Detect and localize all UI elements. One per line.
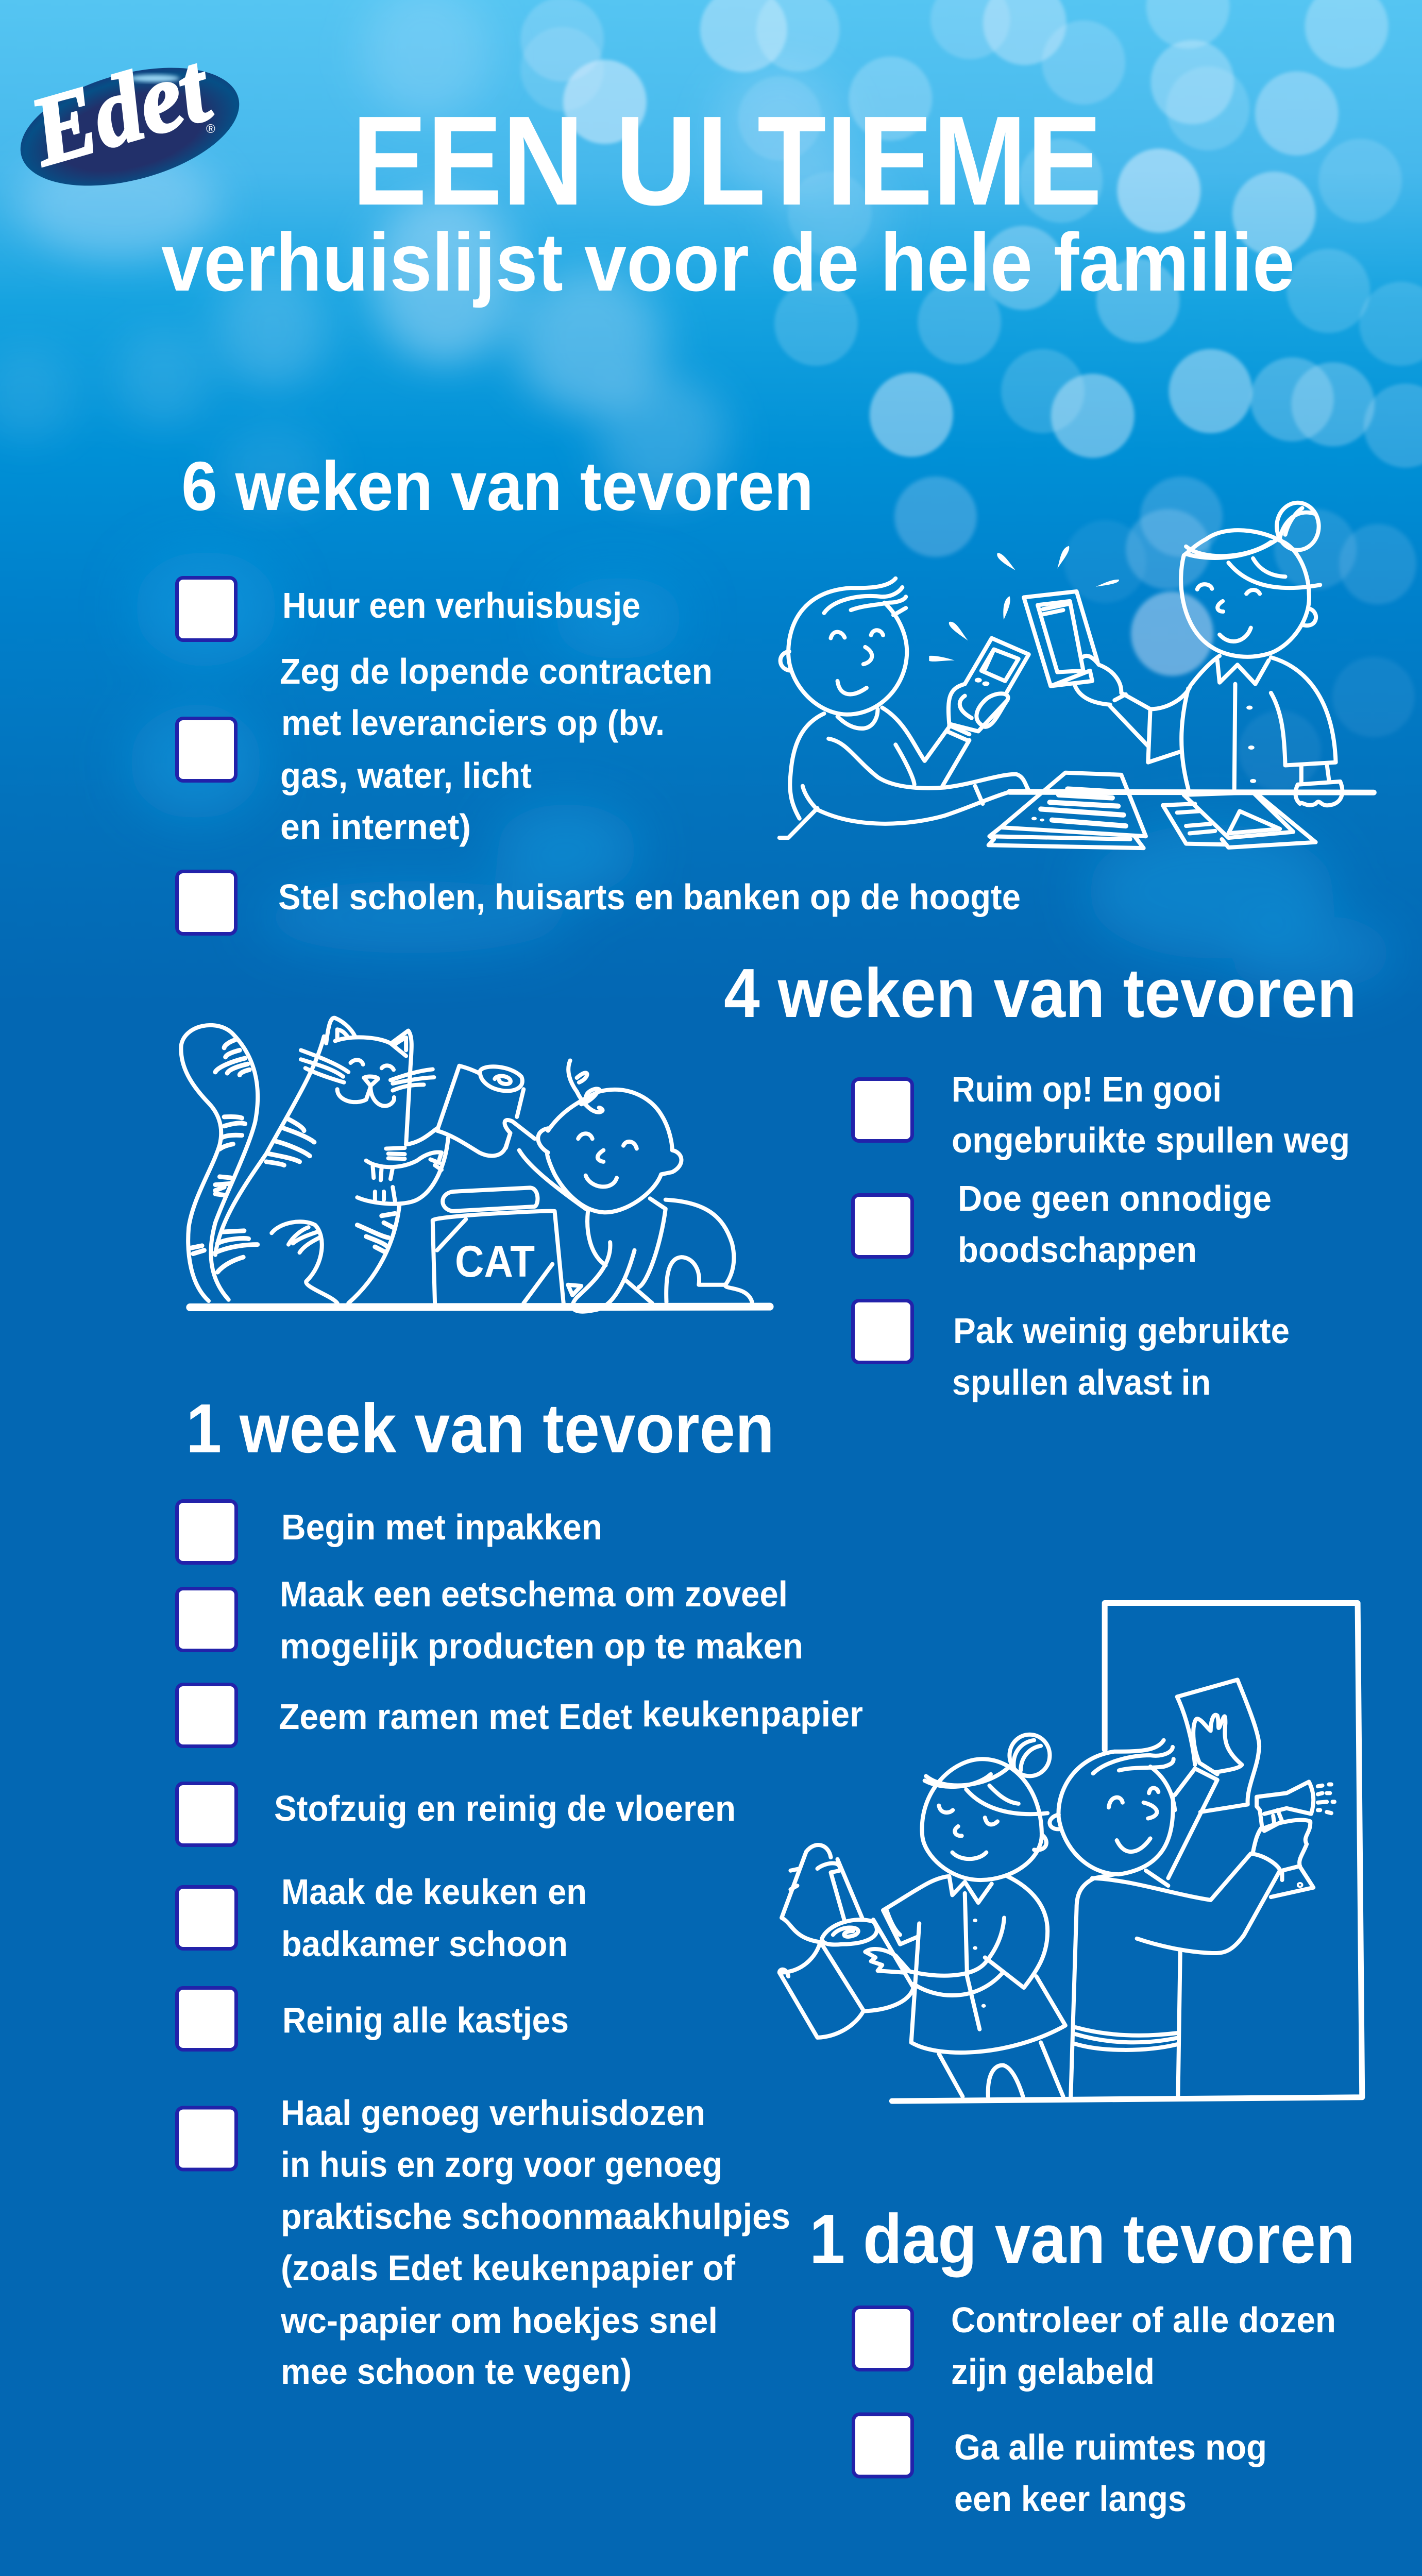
heading: 1 dag van tevoren <box>809 2200 1355 2278</box>
item text: Ga alle ruimtes nog <box>954 2427 1267 2467</box>
item text: Zeem ramen met Edet <box>279 1697 632 1737</box>
item text: Reinig alle kastjes <box>282 2000 569 2040</box>
item text <box>281 1872 587 1964</box>
item text: spullen alvast in <box>952 1362 1211 1402</box>
item text <box>951 2300 1336 2392</box>
panel: 1 week van tevoren <box>177 1389 863 2392</box>
item text: mee schoon te vegen) <box>281 2351 632 2392</box>
item text: wc-papier om hoekjes snel <box>280 2300 718 2341</box>
heading: 4 weken van tevoren <box>724 954 1357 1032</box>
woman <box>1024 503 1342 805</box>
item text: Pak weinig gebruikte <box>953 1311 1290 1351</box>
item text <box>280 651 713 847</box>
checkbox <box>853 1195 912 1257</box>
background bokeh blurred <box>0 0 889 510</box>
illustration: cat and baby with paper roll <box>179 1016 774 1314</box>
item text: Ruim op! En gooi <box>952 1069 1222 1109</box>
item text: Begin met inpakken <box>281 1507 602 1547</box>
item text: in huis en zorg voor genoeg <box>281 2144 722 2184</box>
item text: ongebruikte spullen weg <box>952 1120 1350 1160</box>
item text: Zeg de lopende contracten <box>280 651 713 691</box>
item text: keukenpapier <box>642 1694 863 1734</box>
papers <box>989 773 1316 848</box>
item text: Maak een eetschema om zoveel <box>280 1574 788 1614</box>
item text: zijn gelabeld <box>951 2351 1155 2392</box>
checkbox <box>177 578 236 640</box>
checkbox <box>177 2108 236 2170</box>
paper roll <box>437 1066 523 1156</box>
item text <box>958 1178 1272 1270</box>
item text: Haal genoeg verhuisdozen <box>281 2093 705 2133</box>
checkbox <box>177 1501 236 1563</box>
item text: een keer langs <box>954 2479 1187 2519</box>
checkbox <box>853 1300 912 1362</box>
item text: Maak de keuken en <box>281 1872 587 1912</box>
item text: badkamer schoon <box>281 1924 568 1964</box>
man <box>780 579 1029 838</box>
checkbox <box>177 872 236 934</box>
item text <box>952 1069 1350 1160</box>
item text: mogelijk producten op te maken <box>280 1626 803 1666</box>
panel: 1 dag van tevoren <box>809 2200 1355 2519</box>
illustration: couple cleaning window <box>777 1600 1365 2104</box>
item text: Stel scholen, huisarts en banken op de hoogte <box>278 877 1021 917</box>
item text <box>954 2427 1267 2519</box>
item text: Controleer of alle dozen <box>951 2300 1336 2340</box>
checkbox <box>177 1887 236 1948</box>
item text <box>280 1574 803 1666</box>
paper roll and bottle <box>780 1845 913 2038</box>
item text: Doe geen onnodige <box>958 1178 1272 1218</box>
background bokeh circles lower <box>894 477 1416 791</box>
checkbox <box>853 2414 912 2477</box>
panel: 6 weken van tevoren <box>177 447 1021 934</box>
heading: 6 weken van tevoren <box>181 447 814 525</box>
checkbox <box>177 718 236 781</box>
checkbox <box>177 1988 236 2049</box>
logo: Edet: Edet <box>19 33 223 187</box>
background bokeh circles upper <box>520 0 1422 468</box>
item text: Huur een verhuisbusje <box>282 585 640 625</box>
cat food box <box>433 1188 564 1303</box>
floor <box>190 1307 770 1308</box>
panel: 4 weken van tevoren <box>724 954 1357 1402</box>
checkbox <box>853 1079 912 1141</box>
baby <box>504 1060 752 1312</box>
item text: (zoals Edet keukenpapier of <box>281 2248 736 2288</box>
logo: Edet: ® <box>206 122 215 136</box>
checkbox <box>177 1685 236 1747</box>
checkbox <box>853 2307 912 2370</box>
item text: boodschappen <box>958 1230 1197 1270</box>
item text: Stofzuig en reinig de vloeren <box>274 1788 736 1828</box>
item text: met leveranciers op (bv. <box>281 703 665 743</box>
item text: en internet) <box>280 807 471 847</box>
item text <box>279 1694 863 1737</box>
checkbox <box>177 1589 236 1651</box>
window frame and floor <box>892 1603 1362 2101</box>
subtitle: verhuislijst voor de hele familie <box>161 216 1295 308</box>
item text <box>280 2093 790 2392</box>
background gradient <box>0 0 1422 1005</box>
cat <box>181 1018 448 1303</box>
man <box>1049 1680 1334 2096</box>
label: CAT: CAT <box>455 1237 535 1286</box>
checkbox <box>177 1784 236 1845</box>
item text: praktische schoonmaakhulpjes <box>281 2196 790 2236</box>
sparkles <box>929 546 1119 662</box>
background glow lower <box>129 551 1396 989</box>
illustration: couple with phones and papers <box>777 501 1377 850</box>
item text <box>952 1311 1290 1402</box>
heading: 1 week van tevoren <box>186 1389 774 1467</box>
woman <box>883 1735 1065 2096</box>
title: EEN ULTIEME <box>352 90 1102 232</box>
item text: gas, water, licht <box>280 755 532 795</box>
